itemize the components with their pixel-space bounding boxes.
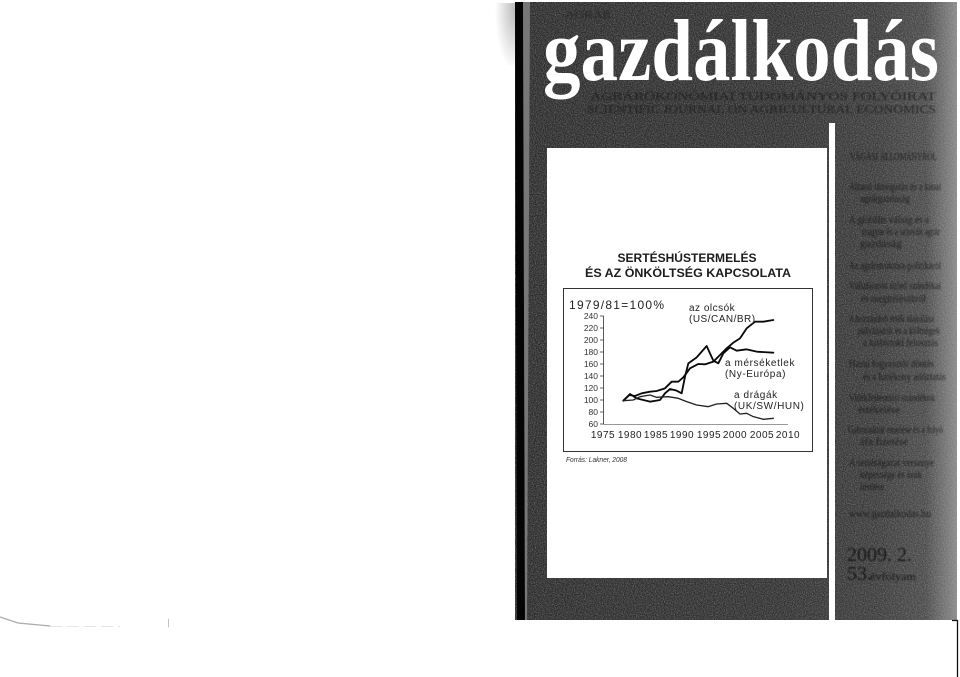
cover sidebar contents: a kisbirtoki felosztás <box>863 338 938 349</box>
y axis: 240 <box>584 311 598 321</box>
white cover panel <box>547 148 827 578</box>
x axis: 1985 <box>644 430 668 441</box>
y axis: 140 <box>584 371 598 381</box>
chart title <box>585 252 791 280</box>
y axis: 180 <box>584 347 598 357</box>
series label: az olcsók: az olcsók <box>689 303 736 314</box>
y axis: 100 <box>584 395 598 405</box>
top-left page shadow <box>495 3 515 65</box>
y axis: 60 <box>589 419 598 429</box>
cover sidebar contents: áfa fizetése <box>860 437 908 448</box>
cover sidebar contents: A sertéságazat versenye <box>849 458 934 469</box>
cover white vertical bar <box>829 123 835 621</box>
x axis: 1975 <box>591 430 615 441</box>
cover sidebar contents: és megítélésükről <box>861 294 926 305</box>
line: a mérsékeltek <box>623 346 773 402</box>
cover background <box>515 2 957 620</box>
cover sidebar contents <box>848 151 946 520</box>
cover sidebar contents: gazdaság <box>860 239 903 250</box>
line: az olcsók <box>623 320 773 401</box>
cover spine <box>515 2 530 620</box>
line: a drágák <box>623 395 773 419</box>
series label: a mérsékeltek: (Ny-Európa) <box>725 369 786 380</box>
cover sidebar contents: www.gazdalkodas.hu <box>849 509 932 520</box>
cover subtitle <box>587 89 936 116</box>
series label: az olcsók <box>689 303 756 325</box>
x axis <box>591 424 800 441</box>
x axis: 1990 <box>670 430 694 441</box>
page corner mark <box>952 620 958 677</box>
cover sidebar contents: képessége és árak <box>860 470 923 481</box>
source note: Forrás: Lakner, 2008 <box>566 457 627 464</box>
y axis: 160 <box>584 359 598 369</box>
cover issue date: 53. <box>847 563 872 585</box>
x axis: 2005 <box>750 430 774 441</box>
bottom-left scan mark <box>0 617 168 627</box>
cover sidebar contents: kérdése <box>860 482 884 493</box>
cover sidebar contents: Hazai fogyasztói döntés <box>849 359 934 370</box>
cover subtitle: SCIENTIFIC JOURNAL ON AGRICULTURAL ECONOMICS <box>587 104 936 116</box>
journal cover <box>515 2 957 621</box>
cover issue date: 2009. 2. <box>847 544 912 566</box>
y axis: 200 <box>584 335 598 345</box>
x axis: 2010 <box>776 430 800 441</box>
series label: a mérsékeltek <box>725 358 795 380</box>
data lines <box>623 320 773 419</box>
y axis <box>584 311 604 429</box>
x axis: 1980 <box>618 430 642 441</box>
series label: a mérsékeltek: a mérséketlek <box>725 358 795 369</box>
chart frame <box>564 288 812 452</box>
chart title: SERTÉSHÚSTERMELÉS <box>618 252 757 265</box>
chart title: ÉS AZ ÖNKÖLTSÉG KAPCSOLATA <box>585 267 791 280</box>
cover sidebar contents: agrárgazdaság <box>860 194 911 205</box>
y axis: 80 <box>589 407 598 417</box>
cover sidebar contents: A globális válság és a <box>849 215 929 226</box>
cover issue date: évfolyam <box>870 571 916 583</box>
base index label: 1979/81=100% <box>569 298 664 312</box>
cover sidebar contents: értékelése <box>858 405 900 416</box>
x axis: 1995 <box>697 430 721 441</box>
y axis: 120 <box>584 383 598 393</box>
series label: a drágák <box>734 390 804 412</box>
small masthead text: AGRÁR <box>565 9 612 21</box>
cover sidebar contents: Vidékfejlesztési szándékok <box>849 393 936 404</box>
series label: a drágák: a drágák <box>734 390 778 401</box>
series label: az olcsók: (US/CAN/BR) <box>689 314 756 325</box>
series label: a drágák: (UK/SW/HUN) <box>734 401 804 412</box>
chart panel <box>564 288 812 452</box>
cover subtitle: AGRÁRÖKONÓMIAI TUDOMÁNYOS FOLYÓIRAT <box>590 89 936 103</box>
y axis: 220 <box>584 323 598 333</box>
cover issue date <box>847 544 916 585</box>
x axis: 2000 <box>723 430 747 441</box>
cover sidebar contents: és a hatékony adóztatás <box>863 372 946 383</box>
